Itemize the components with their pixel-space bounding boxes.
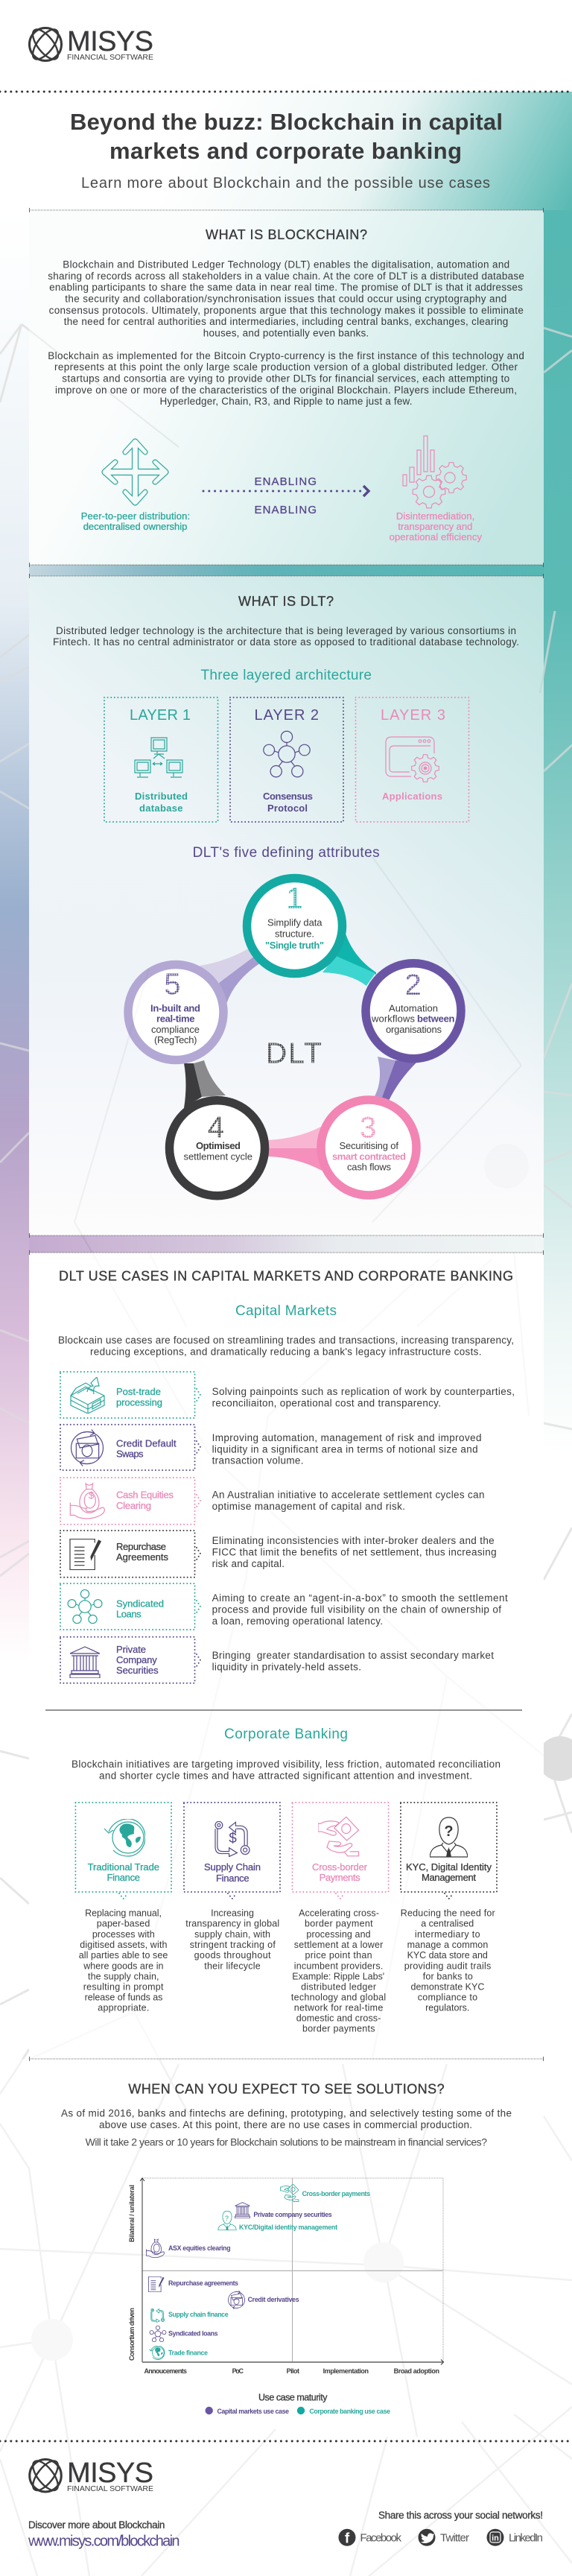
- label: disintermediation: [390, 510, 483, 542]
- panel: layer 1: LAYER 1: [130, 707, 191, 724]
- description: transaction volume.: [212, 1455, 304, 1466]
- marker: ASX: [146, 2239, 231, 2258]
- text block: paragraph 2: improve on one or more of the characteristics of the original Blockchain. Players include Ethereum,: [55, 384, 517, 396]
- logo: Misys header: MISYS: [67, 26, 153, 57]
- step 4: settlement cycle: [183, 1151, 252, 1162]
- icon: facebook: f: [345, 2531, 350, 2547]
- step 5: [128, 964, 223, 1060]
- card: KYC: KYC, Digital Identity: [406, 1861, 492, 1873]
- text block: KYC description: [401, 1908, 495, 2013]
- icon: consensus network: [264, 731, 310, 777]
- marker: trade finance: Trade finance: [168, 2349, 208, 2357]
- text block: corporate banking intro: [72, 1759, 500, 1781]
- marker: private company securities: [235, 2203, 332, 2218]
- card: KYC: ?: [444, 1823, 454, 1840]
- text block: supply chain description: transparency in global: [185, 1919, 279, 1929]
- marker: credit derivatives: [228, 2291, 299, 2309]
- title: markets and corporate banking: [109, 138, 462, 164]
- arrow: enabling: [203, 475, 369, 516]
- icon: application window with gear: [386, 737, 439, 782]
- heading: three layered architecture: Three layered architecture: [201, 668, 372, 683]
- text block: paragraph 1: houses, and potentially even banks.: [203, 328, 369, 338]
- x-axis labels: PoC: [232, 2367, 244, 2375]
- text block: paragraph 2: Blockchain as implemented for the Bitcoin Crypto-currency is the first instance of this technology and: [48, 350, 524, 361]
- text block: KYC description: Reducing the need for: [401, 1908, 495, 1919]
- icon: document and pen: [70, 1539, 101, 1570]
- card: traditional trade finance: [75, 1803, 171, 1899]
- panel: layer 3: LAYER 3: [381, 707, 445, 724]
- panel: layer 1: database: [139, 803, 183, 814]
- panel: layer 2: Consensus: [263, 791, 313, 802]
- icon: banknote cycle: [71, 1430, 104, 1466]
- share prompt: Share this across your social networks!: [378, 2510, 543, 2521]
- connector: 3 to 4: [268, 1127, 325, 1172]
- step 2: organisations: [386, 1024, 442, 1035]
- use case: private company securities: Private: [116, 1644, 146, 1655]
- text block: cross-border description: technology and global: [291, 1992, 386, 2002]
- description: optimise management of capital and risk.: [212, 1501, 405, 1512]
- use case: post-trade processing: [60, 1372, 200, 1418]
- text block: trade finance description: release of funds as: [85, 1992, 162, 2002]
- step 1: [247, 878, 343, 973]
- link text: Discover more about Blockchain: [28, 2519, 165, 2531]
- text block: cross-border description: price point than: [305, 1950, 372, 1961]
- step 2: workflows: [371, 1013, 416, 1025]
- description: [212, 1432, 481, 1466]
- heading: capital markets: Capital Markets: [235, 1303, 337, 1319]
- x-axis labels: Implementation: [323, 2367, 369, 2375]
- use case: cash equities clearing: [60, 1478, 200, 1525]
- text block: trade finance description: where goods are in: [83, 1961, 164, 1971]
- description: Solving painpoints such as replication of work by counterparties,: [212, 1386, 515, 1397]
- text block: KYC description: demonstrate KYC: [411, 1981, 484, 1992]
- panel: what is DLT: [29, 574, 544, 1238]
- y-axis labels: Bilateral / unilateral: [128, 2185, 136, 2242]
- text block: supply chain description: supply chain, with: [194, 1929, 270, 1940]
- centre label: DLT: DLT: [266, 1038, 322, 1070]
- card: KYC: [401, 1803, 497, 1899]
- use case: private company securities: Securities: [116, 1665, 159, 1676]
- description: liquidity in a significant area in terms of notional size and: [212, 1443, 478, 1455]
- icon: network: [68, 1589, 102, 1624]
- text block: trade finance description: processes with: [92, 1929, 155, 1940]
- text block: KYC description: providing audit trails: [404, 1961, 491, 1971]
- text block: cross-border description: border payments: [302, 2024, 375, 2034]
- x-axis labels: Pilot: [287, 2367, 299, 2375]
- connector: 4 to 5: [184, 1060, 226, 1108]
- heading: WHAT IS DLT?: [238, 594, 334, 609]
- icon: facebook: Facebook: [360, 2532, 402, 2545]
- panel: layer 1: [104, 697, 217, 822]
- connector: 2 to 3: [374, 1057, 416, 1101]
- logo: Misys header: FINANCIAL SOFTWARE: [67, 53, 153, 62]
- step 3: 3: [360, 1112, 376, 1145]
- step 2: Automation: [389, 1003, 438, 1014]
- panel: layer 2: [230, 697, 343, 822]
- legend: [206, 2407, 390, 2415]
- text block: cross-border description: domestic and cross-: [296, 2013, 381, 2024]
- label: peer-to-peer: Peer-to-peer distribution:: [81, 510, 190, 522]
- marker: cross-border payments: [281, 2184, 370, 2202]
- logo: Misys footer: [28, 2457, 153, 2494]
- icon: globe: [104, 1819, 145, 1856]
- text block: KYC description: KYC data store and: [407, 1950, 488, 1961]
- text block: corporate banking intro: and shorter cycle times and have attracted significant attention and investment.: [99, 1770, 472, 1781]
- step 5: real-time: [156, 1013, 195, 1025]
- text block: cross-border description: incumbent providers.: [294, 1961, 383, 1971]
- description: a loan, removing operational latency.: [212, 1615, 383, 1627]
- use case: credit default swaps: Credit Default: [116, 1438, 177, 1449]
- use case: repurchase agreements: [60, 1531, 200, 1577]
- icon: banknote between hands: [318, 1817, 359, 1856]
- title: Beyond the buzz: Blockchain in capital: [70, 109, 503, 135]
- use case: cash equities clearing: Cash Equities: [116, 1490, 174, 1501]
- marker: supply chain finance: Supply chain finance: [168, 2311, 229, 2318]
- marker: KYC: KYC/Digital identity management: [239, 2224, 337, 2231]
- step 4: [170, 1101, 265, 1196]
- text block: paragraph 1: Blockchain and Distributed Ledger Technology (DLT) enables the digitalisation, automation and: [63, 259, 509, 270]
- card: supply chain finance: Supply Chain: [204, 1861, 261, 1873]
- text block: paragraph 1: consensus protocols. Ultimately, proponents argue that this technology makes it possible to eliminate: [49, 305, 524, 316]
- description: [212, 1650, 494, 1672]
- use case: post-trade processing: Post-trade: [116, 1386, 161, 1397]
- text block: KYC description: intermediary to: [415, 1929, 480, 1940]
- icon: facebook: [338, 2529, 402, 2547]
- step 1: 1: [286, 882, 303, 915]
- marker: syndicated loans: [150, 2326, 218, 2342]
- step 3: [321, 1100, 416, 1195]
- y-axis labels: [128, 2185, 136, 2361]
- use case: private company securities: [60, 1637, 200, 1683]
- heading: WHAT IS BLOCKCHAIN?: [206, 227, 367, 242]
- text block: paragraph 1: sharing of records across all stakeholders in a value chain. At the core of DLT is a distributed database: [48, 270, 524, 282]
- step 1: Simplify data: [267, 917, 322, 928]
- marker: ASX: ASX equities clearing: [168, 2244, 231, 2252]
- text block: cross-border description: processing and: [306, 1929, 371, 1940]
- text block: trade finance description: paper-based: [97, 1919, 150, 1929]
- description: [212, 1386, 515, 1409]
- label: peer-to-peer: [81, 510, 190, 532]
- text block: DLT intro: Distributed ledger technology is the architecture that is being leveraged by various consortiums in: [56, 625, 516, 636]
- marker: repurchase: [148, 2276, 238, 2292]
- label: peer-to-peer: decentralised ownership: [83, 521, 187, 532]
- marker: trade finance: [149, 2346, 208, 2360]
- icon: linkedin: [487, 2529, 543, 2546]
- text block: supply chain description: [185, 1908, 279, 1971]
- step 2: 2: [404, 969, 422, 1001]
- card: cross-border payments: Cross-border: [312, 1861, 368, 1873]
- chart: DLT cycle diagram: [128, 878, 461, 1196]
- step 4: Optimised: [196, 1140, 241, 1151]
- step 1: structure.: [275, 928, 314, 940]
- use case: cash equities clearing: $: [89, 1490, 95, 1501]
- text block: trade finance description: digitised assets, with: [80, 1940, 167, 1950]
- step 5: In-built and: [150, 1003, 200, 1014]
- text block: trade finance description: the supply chain,: [88, 1971, 159, 1981]
- description: [212, 1592, 508, 1627]
- icon: four-way arrows: [102, 439, 168, 505]
- use case: credit default swaps: Swaps: [116, 1449, 144, 1460]
- text block: cross-border description: border payment: [305, 1919, 373, 1929]
- description: liquidity in privately-held assets.: [212, 1661, 361, 1672]
- icon: box with arrow: [71, 1377, 104, 1414]
- card: supply chain finance: Finance: [216, 1873, 250, 1884]
- subtitle: Learn more about Blockchain and the possible use cases: [81, 175, 490, 192]
- text block: KYC description: compliance to: [418, 1992, 477, 2002]
- logo: Misys footer: MISYS: [67, 2458, 153, 2489]
- text block: paragraph 1: enabling participants to share the same data in near real time. The promise of DLT is that it addresses: [49, 282, 523, 293]
- card: cross-border payments: [292, 1803, 389, 1899]
- heading: DLT USE CASES IN CAPITAL MARKETS AND CORPORATE BANKING: [59, 1269, 513, 1284]
- text block: cross-border description: distributed ledger: [301, 1981, 376, 1992]
- icon: bars and gears: [403, 436, 466, 508]
- description: Bringing greater standardisation to assist secondary market: [212, 1650, 494, 1661]
- text block: paragraph 1: the need for central authorities and intermediaries, including central banks, exchanges, clearing: [64, 316, 508, 327]
- text block: status: As of mid 2016, banks and fintechs are defining, prototyping, and selectively testing some of the: [61, 2108, 512, 2119]
- panel: layer 3: Applications: [382, 791, 442, 802]
- description: reconciliaiton, operational cost and transparency.: [212, 1398, 441, 1409]
- panel: layer 2: Protocol: [267, 803, 308, 814]
- text block: supply chain description: goods throughout: [194, 1950, 271, 1961]
- use case: syndicated loans: [60, 1583, 200, 1630]
- marker: supply chain finance: [151, 2308, 229, 2323]
- step 2: [366, 963, 461, 1059]
- heading: WHEN CAN YOU EXPECT TO SEE SOLUTIONS?: [128, 2081, 445, 2096]
- x-axis labels: [144, 2367, 439, 2375]
- use case: repurchase agreements: Repurchase: [116, 1541, 166, 1552]
- step 4: 4: [208, 1111, 224, 1144]
- link text: [28, 2519, 180, 2550]
- card: traditional trade finance: Traditional Trade: [88, 1861, 159, 1873]
- link text: www.misys.com/blockchain: [28, 2534, 180, 2550]
- description: process and provide full visibility on the chain of ownership of: [212, 1604, 501, 1615]
- step 3: Securitising of: [340, 1140, 398, 1151]
- panel: layer 2: LAYER 2: [255, 707, 319, 724]
- text block: status: [61, 2108, 512, 2130]
- step 5: (RegTech): [154, 1034, 197, 1045]
- icon: linkedin: in: [492, 2534, 499, 2542]
- text block: cross-border description: [291, 1908, 386, 2034]
- x-axis labels: Broad adoption: [394, 2367, 439, 2375]
- step 5: 5: [164, 968, 181, 1001]
- text block: cross-border description: network for real-time: [294, 2003, 383, 2013]
- text block: paragraph 2: startups and consortia are vying to provide other DLTs for financial services, each attempting to: [62, 373, 509, 384]
- use case: private company securities: Company: [116, 1654, 157, 1665]
- text block: paragraph 1: [48, 259, 524, 338]
- heading: corporate banking: Corporate Banking: [224, 1727, 348, 1742]
- connector: 1 to 2: [322, 934, 376, 986]
- marker: repurchase: Repurchase agreements: [168, 2279, 238, 2287]
- text block: paragraph 1: the security and collaboration/synchronisation issues that could occur using cryptography and: [65, 294, 506, 304]
- connector: 5 to 1: [200, 948, 261, 1004]
- text block: paragraph 2: Hyperledger, Chain, R3, and Ripple to name just a few.: [159, 396, 413, 407]
- description: Improving automation, management of risk and improved: [212, 1432, 481, 1443]
- icon: person with question mark: [430, 1817, 468, 1857]
- use case: syndicated loans: Syndicated: [116, 1598, 164, 1610]
- text block: DLT intro: Fintech. It has no central administrator or data store as opposed to traditional database technology.: [53, 636, 519, 648]
- marker: KYC: [218, 2211, 337, 2231]
- step 2: between: [417, 1013, 455, 1025]
- panel: layer 3: [356, 697, 469, 822]
- text block: capital markets intro: [58, 1335, 514, 1358]
- panel: what is blockchain: [29, 208, 544, 567]
- description: [212, 1490, 484, 1512]
- card: cross-border payments: Payments: [320, 1872, 360, 1883]
- icon: twitter: [419, 2529, 469, 2546]
- legend: Capital markets use case: [217, 2408, 289, 2415]
- text block: KYC description: a centralised: [421, 1919, 474, 1929]
- step 1: "Single truth": [265, 940, 324, 951]
- icon: distributed computers: [135, 738, 182, 777]
- text block: supply chain description: Increasing: [211, 1908, 254, 1919]
- step 3: cash flows: [347, 1162, 392, 1173]
- panel: layer 1: Distributed: [135, 791, 188, 802]
- logo: Misys header: [28, 25, 153, 63]
- footer: [28, 2457, 543, 2550]
- legend: Corporate banking use case: [309, 2408, 390, 2415]
- arrow: enabling: ENABLING: [255, 504, 317, 516]
- text block: supply chain description: stringent tracking of: [190, 1940, 276, 1950]
- question: Will it take 2 years or 10 years for Blockchain solutions to be mainstream in financial services?: [86, 2136, 487, 2148]
- panel: DLT use cases: [29, 1250, 544, 2061]
- card: KYC: Management: [422, 1872, 476, 1883]
- text block: KYC description: for banks to: [423, 1971, 473, 1981]
- use case: cash equities clearing: Clearing: [116, 1500, 151, 1511]
- marker: KYC: ?: [225, 2215, 229, 2222]
- description: Aiming to create an “agent-in-a-box” to smooth the settlement: [212, 1592, 508, 1604]
- text block: corporate banking intro: Blockchain initiatives are targeting improved visibility, less friction, automated reconciliation: [72, 1759, 500, 1770]
- icon: money bag in hand: [70, 1484, 104, 1519]
- use case: credit default swaps: [60, 1425, 200, 1470]
- description: An Australian initiative to accelerate settlement cycles can: [212, 1490, 484, 1501]
- marker: private company securities: Private company securities: [253, 2211, 332, 2218]
- use case: repurchase agreements: Agreements: [116, 1551, 168, 1563]
- arrow: enabling: ENABLING: [255, 475, 317, 488]
- use case: post-trade processing: processing: [116, 1397, 162, 1408]
- icon: twitter: Twitter: [440, 2532, 469, 2545]
- card: traditional trade finance: Finance: [107, 1872, 140, 1883]
- y-axis labels: Consortium driven: [128, 2308, 136, 2361]
- text block: paragraph 2: represents at this point the only large scale production version of a global distributed ledger. Other: [54, 361, 518, 373]
- description: [212, 1535, 497, 1569]
- text block: cross-border description: Example: Ripple Labs': [292, 1971, 384, 1981]
- text block: trade finance description: [79, 1908, 168, 2013]
- text block: trade finance description: Replacing manual,: [85, 1908, 162, 1919]
- text block: paragraph 2: [48, 350, 524, 407]
- icon: linkedin: LinkedIn: [509, 2532, 543, 2545]
- title: [70, 109, 503, 164]
- text block: KYC description: regulators.: [425, 2003, 469, 2013]
- text block: KYC description: manage a common: [407, 1940, 488, 1950]
- text block: trade finance description: resulting in prompt: [83, 1981, 164, 1992]
- text block: supply chain description: their lifecycle: [204, 1961, 261, 1971]
- text block: trade finance description: all parties able to see: [79, 1950, 168, 1961]
- text block: status: above use cases. At this point, there are no use cases in commercial production.: [99, 2119, 472, 2130]
- icon: temple: [70, 1647, 100, 1678]
- use case: syndicated loans: Loans: [116, 1609, 142, 1620]
- axis title: Use case maturity: [258, 2393, 328, 2403]
- text block: DLT intro: [53, 625, 519, 648]
- label: disintermediation: operational efficiency: [390, 531, 483, 542]
- label: disintermediation: transparency and: [398, 521, 472, 532]
- description: risk and capital.: [212, 1558, 285, 1569]
- section: when can you expect to see solutions: [61, 2081, 512, 2415]
- marker: syndicated loans: Syndicated loans: [168, 2329, 218, 2337]
- chart: use case maturity matrix: [128, 2178, 444, 2415]
- step 5: compliance: [151, 1024, 200, 1035]
- marker: cross-border payments: Cross-border payments: [302, 2190, 370, 2197]
- text block: capital markets intro: Blockcain use cases are focused on streamlining trades and transactions, increasing transparency,: [58, 1335, 514, 1346]
- icon: supply chain: [215, 1821, 250, 1856]
- label: disintermediation: Disintermediation,: [396, 510, 474, 522]
- card: supply chain finance: [184, 1803, 280, 1899]
- text block: capital markets intro: reducing exceptions, and dramatically reducing a bank's legacy infrastructure costs.: [90, 1346, 481, 1358]
- text block: cross-border description: settlement at a lower: [294, 1940, 383, 1950]
- text block: trade finance description: appropriate.: [98, 2003, 149, 2013]
- marker: credit derivatives: Credit derivatives: [248, 2296, 299, 2303]
- step 3: smart contracted: [332, 1151, 406, 1162]
- text block: cross-border description: Accelerating cross-: [299, 1908, 379, 1919]
- description: FICC that limit the benefits of net settlement, thus increasing: [212, 1547, 497, 1558]
- heading: five defining attributes: DLT's five defining attributes: [193, 845, 380, 861]
- description: Eliminating inconsistencies with inter-broker dealers and the: [212, 1535, 495, 1546]
- card: supply chain finance: $: [229, 1831, 237, 1846]
- logo: Misys footer: FINANCIAL SOFTWARE: [67, 2484, 153, 2493]
- x-axis labels: Annoucements: [144, 2367, 187, 2375]
